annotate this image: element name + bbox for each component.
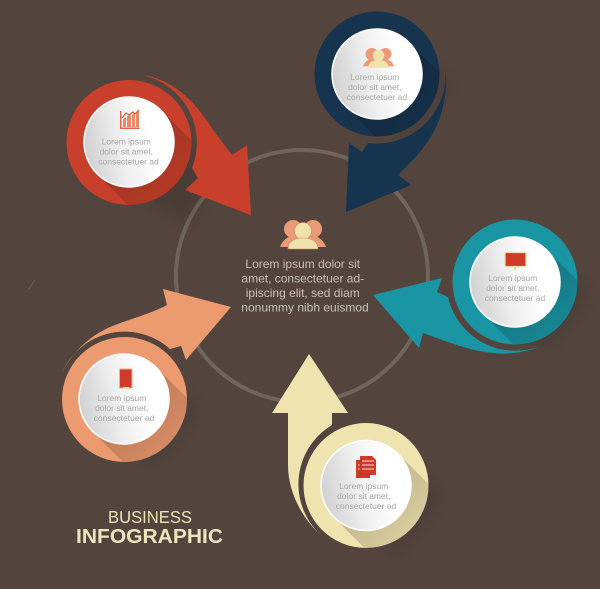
text: Lorem ipsum [97, 393, 146, 403]
center ring [176, 150, 428, 402]
text: dolor sit amet, [348, 82, 401, 92]
outer shadow [92, 367, 199, 465]
arrow: cream [272, 354, 348, 537]
text: consectetuer ad [347, 92, 408, 102]
panel: red [66, 75, 251, 215]
panel: peach [62, 289, 231, 462]
text: consectetuer ad [94, 413, 155, 423]
title line: infographic: INFOGRAPHIC [76, 526, 223, 548]
icon: people [363, 48, 394, 68]
navy disc [314, 12, 440, 136]
center text: amet, consectetuer ad- [241, 272, 364, 286]
text: Lorem ipsum [350, 72, 399, 82]
outer shadow [97, 110, 215, 225]
text: Lorem ipsum [488, 273, 537, 283]
long shadow [102, 114, 192, 205]
text: dolor sit amet, [337, 491, 390, 501]
arrow: peach [62, 289, 231, 373]
white disc [79, 354, 169, 444]
outer shadow [345, 42, 452, 140]
icon: document [356, 456, 376, 478]
text: consectetuer ad [336, 501, 397, 511]
center block: icon and text [241, 220, 369, 314]
long shadow [352, 48, 440, 136]
icon: people [280, 220, 326, 249]
outer shadow [334, 454, 441, 552]
icon: chart [120, 110, 140, 129]
title [76, 507, 223, 548]
title line: business: BUSINESS [108, 507, 192, 527]
text: Lorem ipsum [102, 136, 151, 146]
outer shadow [483, 250, 590, 348]
text: consectetuer ad [485, 293, 546, 303]
arrow: red [142, 75, 251, 215]
red disc [66, 80, 192, 205]
text: Lorem ipsum [339, 481, 388, 491]
long shadow [338, 458, 428, 548]
cream disc [304, 423, 428, 548]
text: dolor sit amet, [95, 403, 148, 413]
long shadow [96, 372, 187, 462]
white disc [321, 440, 411, 530]
center text: ipiscing elit, sed diam [246, 286, 360, 300]
white disc [84, 97, 174, 187]
text: dolor sit amet, [100, 146, 153, 156]
long shadow [488, 254, 578, 344]
text: consectetuer ad [98, 156, 159, 166]
peach disc [62, 337, 187, 462]
center text: Lorem ipsum dolor sit [245, 257, 361, 271]
panel: cream [272, 354, 428, 548]
panel: teal [373, 220, 578, 354]
icon: tablet [120, 369, 132, 389]
white disc [332, 29, 422, 119]
faint mark [29, 280, 35, 289]
white disc [470, 237, 560, 327]
text: dolor sit amet, [486, 283, 539, 293]
panel: navy [314, 12, 446, 212]
teal disc [452, 220, 578, 344]
center text: nonummy nibh euismod [241, 300, 369, 314]
icon: sign [505, 252, 526, 271]
arrow: teal [373, 278, 547, 354]
arrow: navy [346, 65, 446, 212]
